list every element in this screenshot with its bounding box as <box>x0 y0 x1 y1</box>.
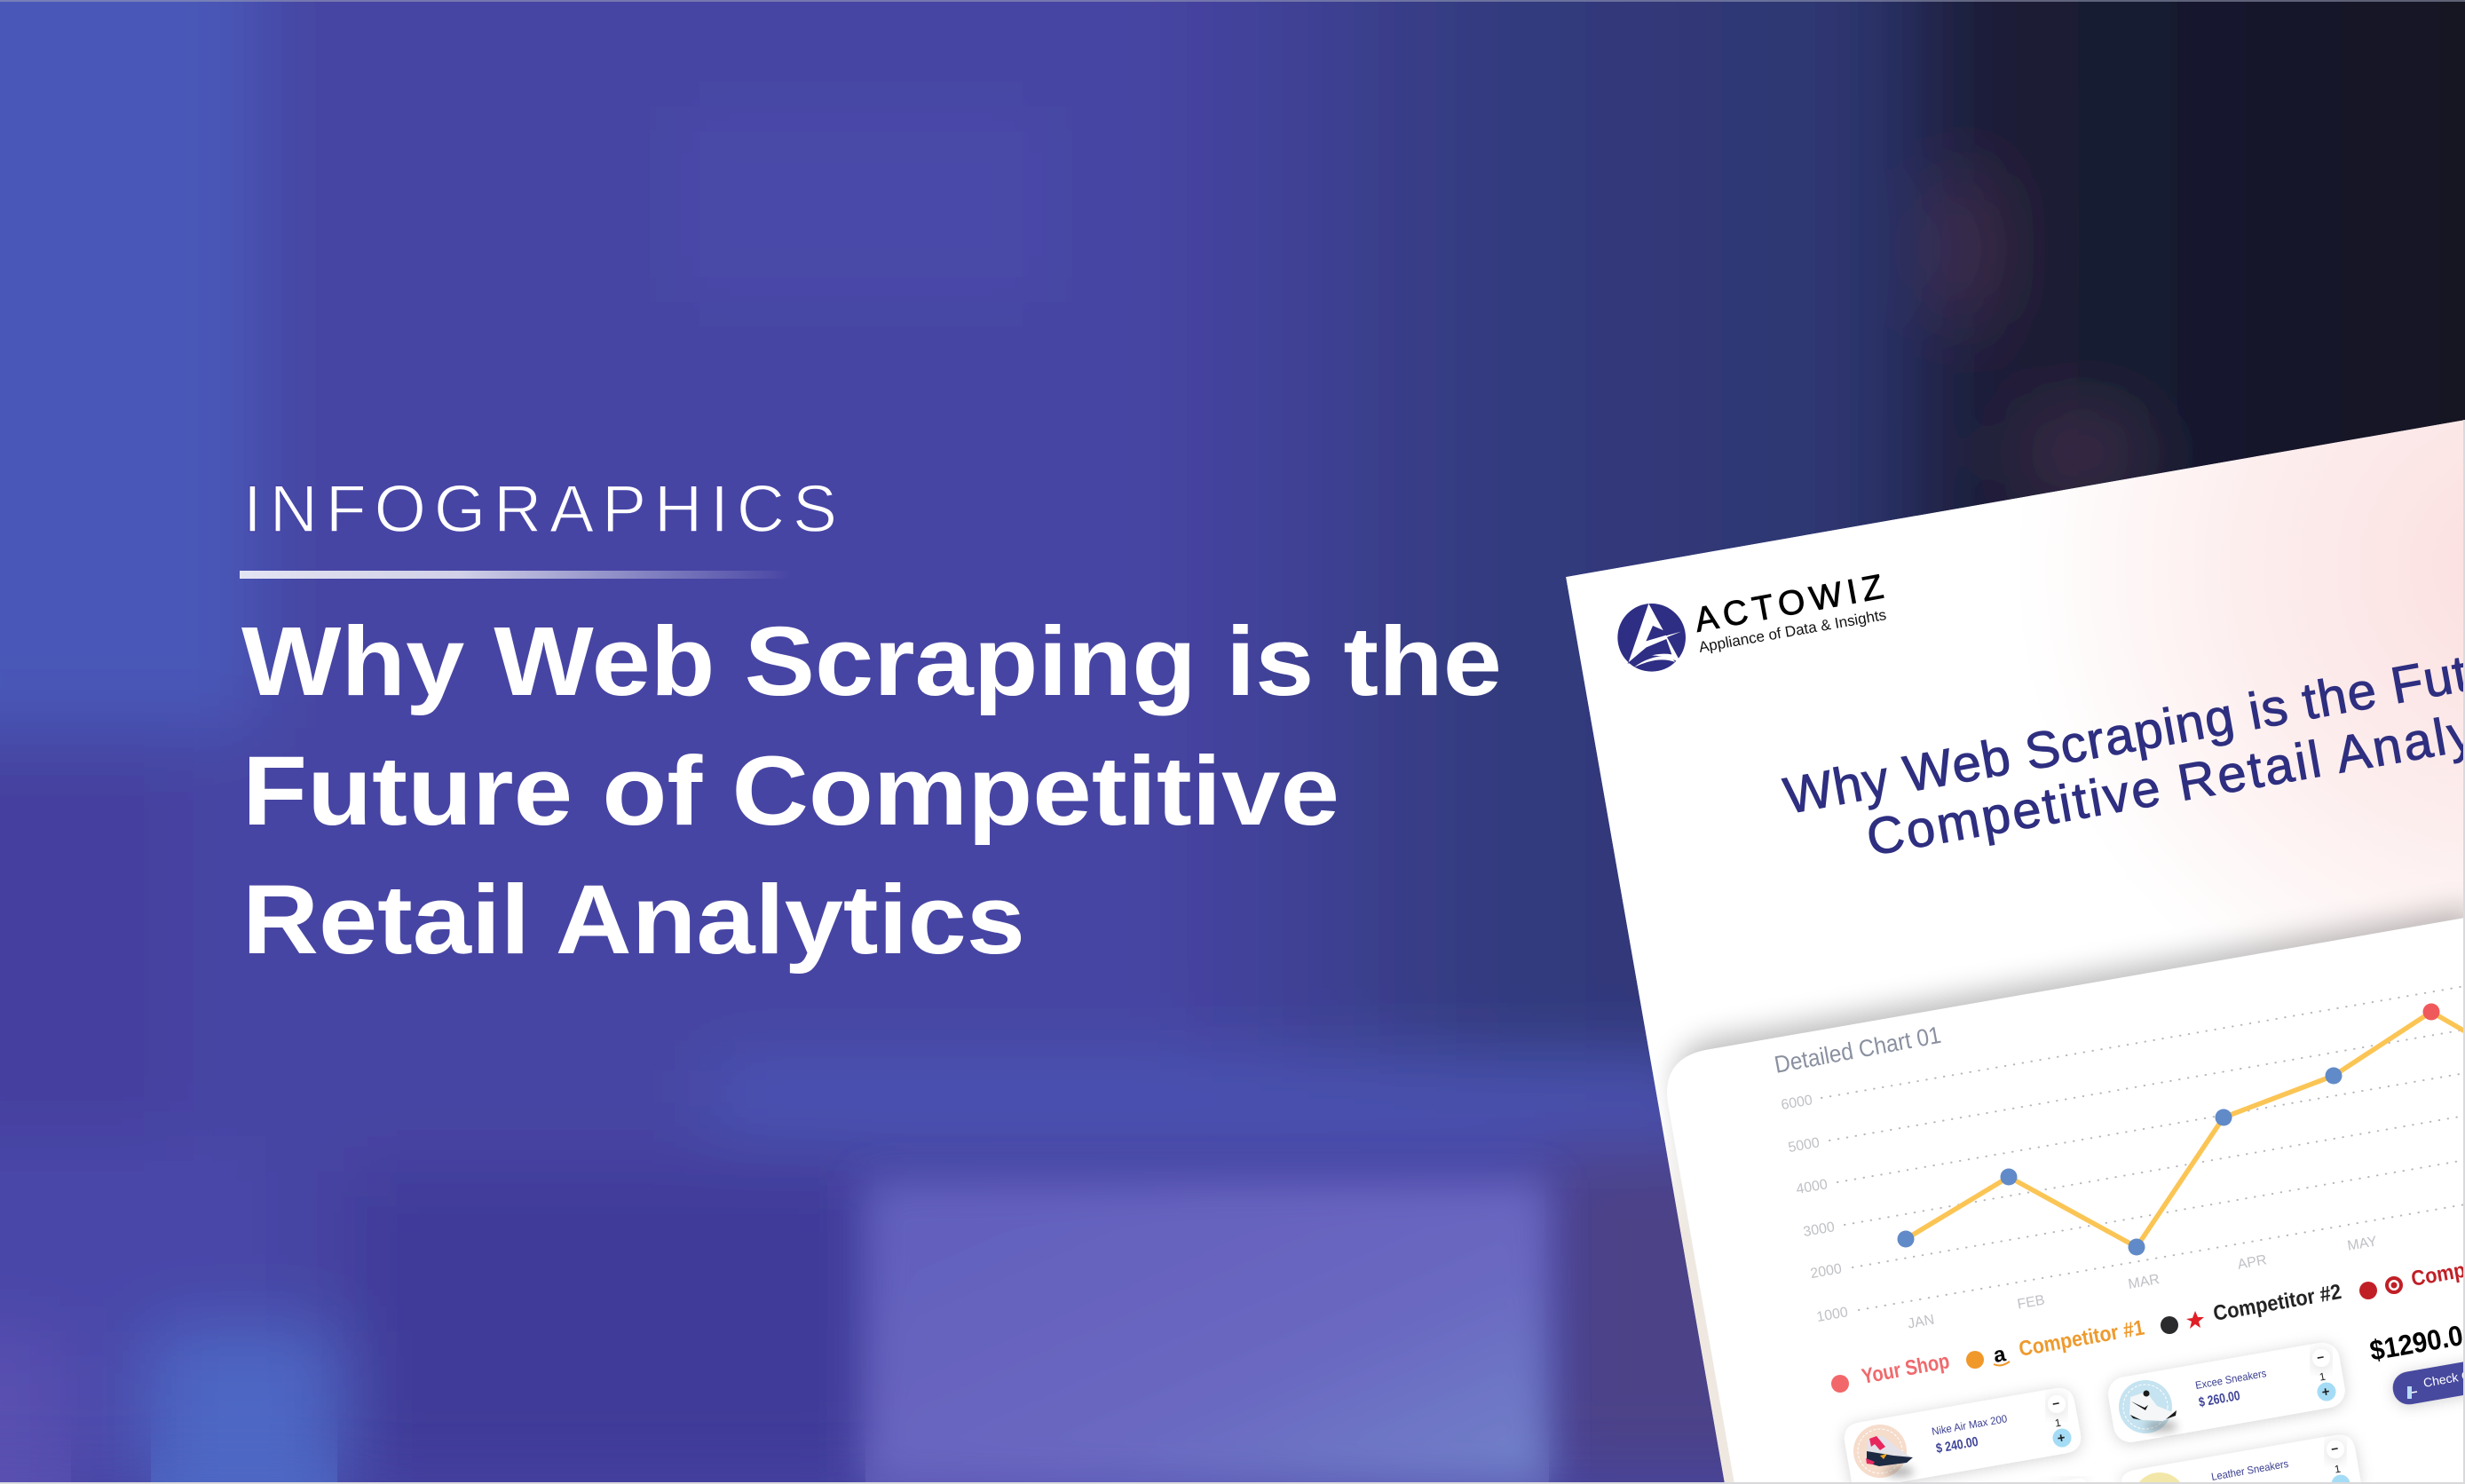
divider rule <box>240 571 792 579</box>
y axis labels: 4000 <box>1795 1177 1829 1197</box>
logo wordmark: ACTOWIZ <box>1692 568 1886 640</box>
legend: competitor 1: a <box>1992 1342 2008 1368</box>
legend: your shop: Your Shop <box>1860 1349 1951 1389</box>
main heading <box>241 607 1502 975</box>
main heading: Why Web Scraping is the <box>241 607 1502 716</box>
product card: Excee Sneakers: − <box>2316 1349 2326 1365</box>
x axis labels: MAR <box>2127 1272 2161 1292</box>
x axis labels: JAN <box>1907 1313 1936 1332</box>
x axis labels: MAY <box>2346 1234 2379 1254</box>
panel: chart card <box>1662 906 2465 1484</box>
product card: Nike Air Max 200: Nike Air Max 200 <box>1931 1412 2009 1438</box>
legend: your shop <box>1831 1349 1951 1393</box>
legend: competitor 2 <box>2161 1280 2343 1334</box>
product card: Excee Sneakers: $ 260.00 <box>2198 1388 2241 1410</box>
x axis labels: APR <box>2237 1252 2268 1273</box>
data points <box>1898 1003 2439 1255</box>
legend: competitor 3 <box>2359 1245 2465 1299</box>
product card: Leather Sneakers: 1 <box>2334 1463 2342 1476</box>
data line <box>1906 1012 2465 1247</box>
product card: Excee Sneakers: + <box>2320 1384 2331 1401</box>
y axis labels: 2000 <box>1809 1261 1843 1282</box>
chart heading: Detailed Chart 01 <box>1773 1022 1943 1078</box>
logo: Actowiz <box>1617 568 1887 672</box>
y axis labels: 1000 <box>1815 1305 1849 1325</box>
logo tagline: Appliance of Data & Insights <box>1697 606 1887 656</box>
y axis labels: 3000 <box>1802 1220 1836 1240</box>
legend: competitor 2: Competitor #2 <box>2211 1280 2343 1326</box>
legend: competitor 1 <box>1966 1315 2146 1369</box>
y axis labels: 6000 <box>1780 1093 1813 1113</box>
panel: tilted report preview page <box>1566 420 2465 1484</box>
product card: Leather Sneakers: Leather Sneakers <box>2210 1457 2289 1483</box>
product card: partly hidden <box>2042 1479 2087 1484</box>
product card: Nike Air Max 200: 1 <box>2054 1417 2062 1430</box>
product card: Nike Air Max 200: $ 240.00 <box>1935 1434 1979 1456</box>
product card: Excee Sneakers <box>2106 1340 2348 1445</box>
product card: Nike Air Max 200 <box>1845 1388 2081 1484</box>
icon: Actowiz circle mark <box>1617 604 1686 672</box>
icon: sneaker <box>1866 1435 1914 1477</box>
product card: Nike Air Max 200: − <box>2051 1395 2061 1411</box>
icon: white sneaker <box>2129 1390 2177 1432</box>
legend: competitor 1: Competitor #1 <box>2017 1315 2146 1362</box>
y axis labels: 5000 <box>1787 1135 1821 1156</box>
product card: Nike Air Max 200: + <box>2056 1430 2066 1447</box>
line chart <box>1780 986 2465 1332</box>
checkout button <box>2390 1349 2465 1407</box>
product card: Leather Sneakers <box>2121 1434 2361 1484</box>
x axis labels: FEB <box>2016 1292 2046 1313</box>
eyebrow label: INFOGRAPHICS: INFOGRAPHICS <box>243 471 837 546</box>
main heading: Future of Competitive <box>242 737 1339 846</box>
product card: Excee Sneakers: Excee Sneakers <box>2194 1367 2267 1392</box>
product card: Leather Sneakers: − <box>2330 1441 2340 1456</box>
product card: Excee Sneakers: 1 <box>2319 1370 2327 1384</box>
main heading: Retail Analytics <box>242 865 1025 975</box>
image frame edges <box>0 420 2465 1484</box>
y axis labels <box>1780 1093 1849 1325</box>
legend <box>1831 1245 2465 1393</box>
x axis labels <box>1907 1234 2379 1332</box>
